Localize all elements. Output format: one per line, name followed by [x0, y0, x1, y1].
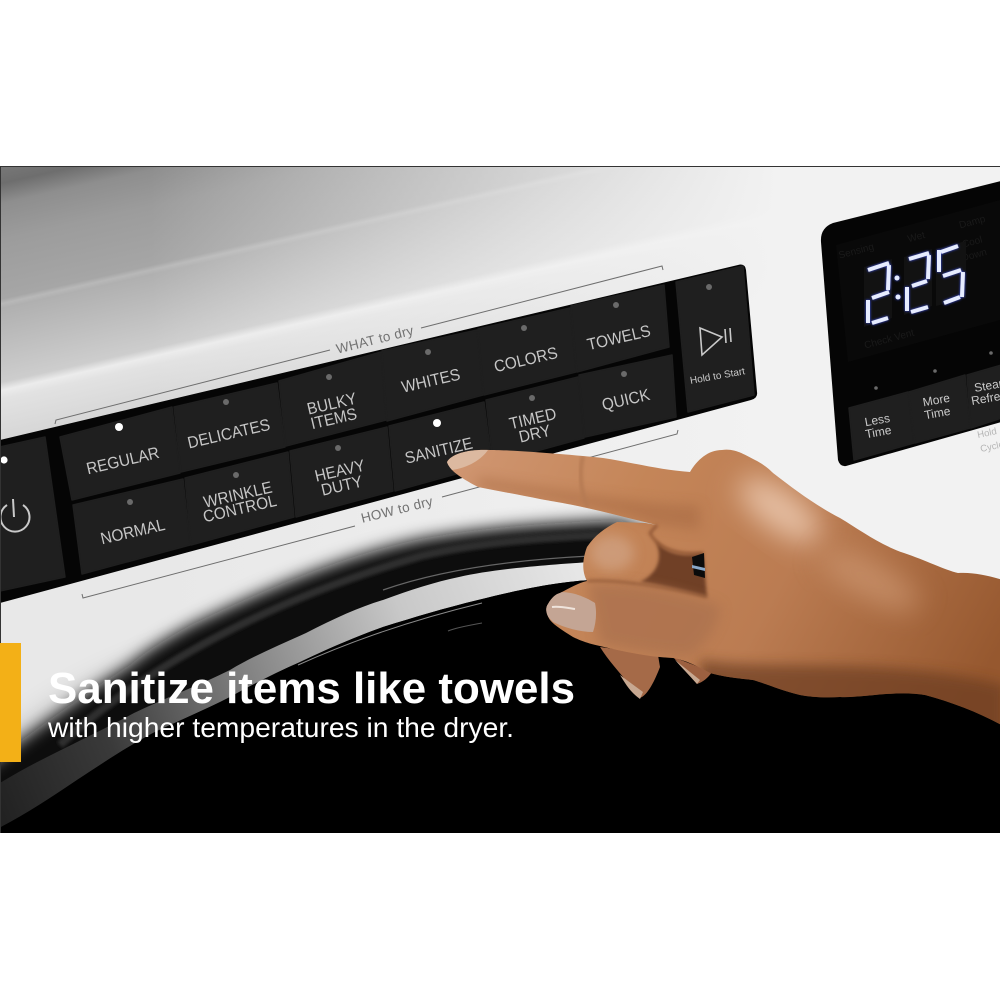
middle finger knuckle: [590, 535, 634, 571]
button: more time: [909, 369, 970, 443]
faint status labels: Wet: [906, 230, 926, 245]
button: heavy duty: HEAVY: [313, 457, 367, 486]
button: start: Hold to Start: [689, 366, 746, 387]
button: quick: [579, 355, 676, 437]
button: whites: WHITES: [400, 366, 462, 397]
lower fingertips: [600, 647, 712, 699]
button: normal: [73, 479, 190, 574]
highlight on back of hand: [729, 466, 831, 554]
frame top line: [0, 166, 1000, 167]
icon: power: [0, 499, 29, 532]
button: less time: [849, 386, 914, 460]
button: heavy duty: DUTY: [320, 473, 365, 500]
index fingernail: [447, 450, 488, 470]
washer body background: [1, 167, 1000, 742]
digit readout 2:25: [868, 246, 963, 323]
display readout window: [836, 200, 1000, 362]
button: delicates: DELICATES: [186, 416, 272, 452]
button: regular: REGULAR: [85, 445, 161, 478]
button: wrinkle control: CONTROL: [201, 492, 279, 526]
thumb top crease: [587, 581, 707, 597]
faint status labels: Damp: [958, 214, 987, 231]
subtitle: with higher temperatures in the dryer.: [47, 712, 514, 743]
button: bulky items: [279, 352, 386, 446]
button: heavy duty: [290, 427, 393, 517]
faint status labels: Sensing: [837, 242, 875, 262]
hand: [440, 440, 1000, 740]
product photo: [0, 167, 1000, 870]
label: what to dry: WHAT to dry: [335, 323, 415, 357]
button: bulky items: BULKY: [305, 390, 359, 419]
button: timed dry: DRY: [517, 422, 553, 447]
button: wrinkle control: [185, 452, 294, 545]
thumb fingernail: [545, 592, 596, 632]
index knuckle crease: [581, 456, 588, 507]
label: hold: Hold: [976, 426, 998, 441]
button: less time: Time: [864, 423, 893, 441]
button: quick: QUICK: [600, 386, 652, 414]
faint status labels: Cool: [961, 235, 984, 251]
faint status labels: Down: [961, 247, 988, 264]
button: sanitize: [389, 402, 492, 491]
button: steam refresh: [967, 351, 1000, 428]
control panel: [0, 265, 757, 603]
button: colors: COLORS: [492, 345, 559, 376]
accent bar: [0, 643, 21, 762]
button: more time: More: [922, 391, 951, 409]
button: timed dry: [486, 377, 584, 463]
display panel: [821, 180, 1000, 466]
button: towels: TOWELS: [586, 323, 652, 354]
button: regular: [60, 407, 180, 500]
index finger shading: [478, 478, 700, 530]
faint status labels: [837, 214, 988, 352]
icon: play pause: [700, 328, 731, 355]
frame left line: [0, 166, 1, 833]
thumb shading: [587, 582, 720, 656]
button: whites: [382, 330, 483, 421]
button: timed dry: TIMED: [508, 406, 558, 433]
blue reflection between fingers: [692, 565, 705, 571]
button: colors: [478, 308, 576, 395]
thumb nail highlight: [552, 607, 575, 609]
index finger underside crease: [650, 525, 703, 553]
faint status labels: Check Vent: [863, 328, 916, 352]
button: more time: Time: [923, 404, 952, 422]
button: bulky items: ITEMS: [309, 406, 359, 433]
shadow on lower hand: [694, 655, 1000, 724]
button: towels: [571, 285, 669, 372]
dryer door: [0, 520, 1000, 870]
button: sanitize: SANITIZE: [403, 435, 475, 468]
button: start: [676, 266, 754, 412]
second highlight on hand: [824, 546, 922, 617]
fold between fingers: [640, 540, 707, 597]
label: how to dry: HOW to dry: [359, 493, 434, 526]
button: power: [0, 437, 65, 592]
button: delicates: [174, 383, 285, 472]
gap between fingers: [692, 553, 705, 578]
ghost digit segments: [864, 241, 966, 327]
label: what to dry: [55, 266, 663, 424]
button: wrinkle control: WRINKLE: [202, 479, 274, 512]
button: less time: Less: [864, 411, 891, 429]
title: Sanitize items like towels: [48, 664, 575, 713]
button: normal: NORMAL: [99, 516, 167, 548]
label: how to dry: [82, 430, 678, 598]
